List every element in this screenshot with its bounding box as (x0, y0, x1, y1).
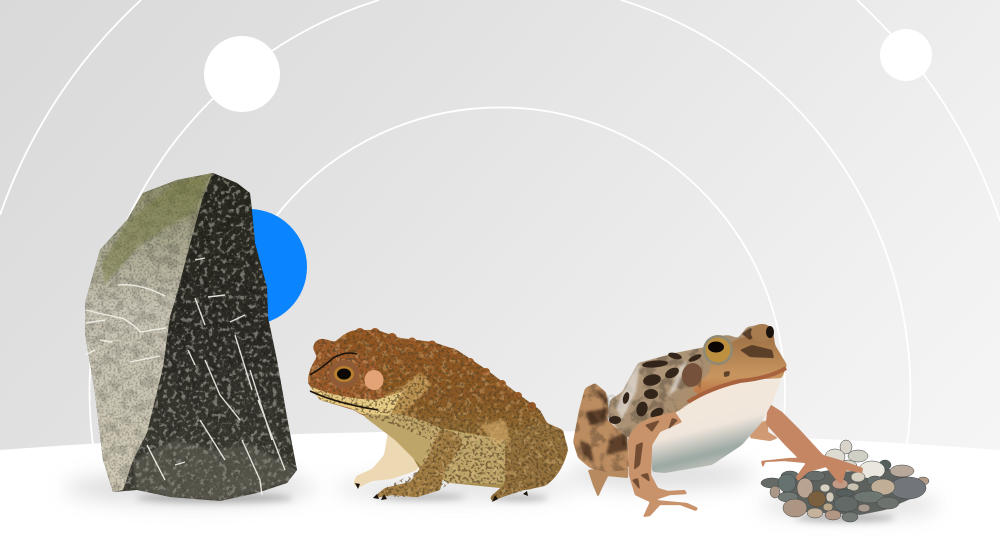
toad jaw (309, 386, 402, 415)
toad parotoid patch (364, 370, 384, 390)
far hind foot (588, 468, 628, 497)
frog back spots (609, 351, 702, 424)
toad (305, 325, 570, 505)
white circle left (204, 36, 280, 112)
frog far arm (750, 420, 778, 441)
frog leg markings (632, 418, 678, 490)
pebbles (761, 440, 929, 522)
toad head (308, 339, 385, 412)
toad shoulder yellow band (372, 372, 432, 420)
frog near eye (703, 335, 733, 365)
frog near front leg (628, 412, 698, 517)
toad warm flank patch (480, 420, 510, 445)
toad hind leg (490, 423, 568, 502)
frog head markings (724, 328, 774, 377)
rock white veins (85, 258, 285, 495)
frog near right arm (761, 403, 863, 484)
toad warts texture (305, 325, 570, 505)
toad claws (355, 483, 528, 502)
frog hind leg (573, 383, 629, 472)
ground shadows (65, 461, 940, 522)
frog head tan (692, 332, 787, 395)
toad brow and mouth lines (310, 353, 378, 410)
toad body (308, 330, 568, 490)
toad bumps along back (355, 328, 536, 410)
toad eye (329, 360, 359, 388)
rock light face (85, 173, 213, 492)
blue circle (191, 209, 307, 325)
far front leg (353, 432, 420, 488)
frog skin mottling (574, 348, 704, 472)
white ground (0, 431, 1000, 539)
white circle right (880, 29, 932, 81)
frog far eye (751, 324, 774, 342)
frog (570, 324, 863, 517)
frog jaw line (688, 368, 786, 402)
toad front leg (373, 430, 462, 498)
rock (80, 170, 305, 505)
frog hind leg markings (580, 390, 628, 462)
toad belly (362, 413, 505, 484)
rock texture (80, 170, 305, 505)
frog white shoulder highlight (616, 360, 688, 420)
pebble base (782, 465, 915, 515)
frog tympanum (679, 361, 705, 389)
frog belly (651, 378, 782, 473)
rock dark face mottling (120, 170, 305, 505)
frog back (608, 324, 787, 440)
